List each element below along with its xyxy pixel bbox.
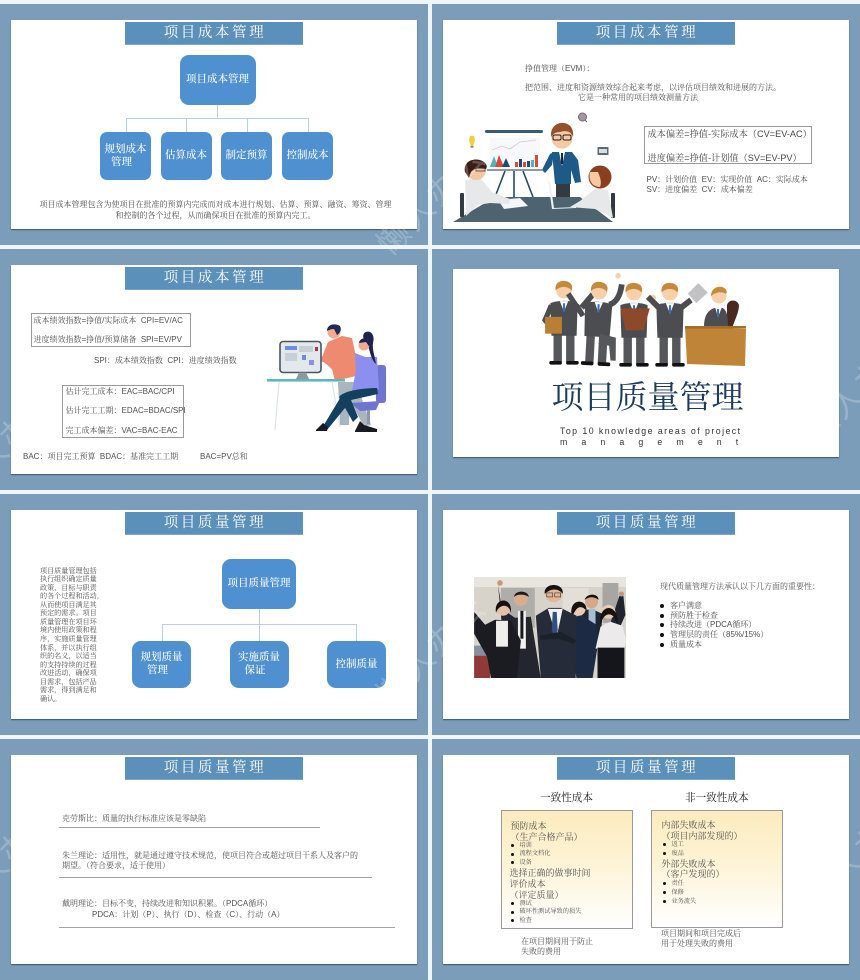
- bullet list: 持续改进（PDCA循环）: [670, 620, 756, 629]
- prevention cost: [510, 821, 583, 842]
- slide: performance indices: [0, 249, 428, 490]
- note: conformance cost: [521, 936, 593, 956]
- description text column: 织的名义，以适当: [40, 652, 97, 660]
- description text column: 确认。: [40, 695, 61, 703]
- external failure cost: （客户发现的）: [662, 869, 725, 879]
- slide: project cost management overview: [0, 4, 428, 245]
- org chart root box: 项目成本管理: [186, 74, 249, 85]
- bullet list: 管理层的责任（85%/15%）: [670, 630, 768, 638]
- legend text: [646, 174, 808, 194]
- external failure bullets: [662, 882, 666, 885]
- appraisal cost: （评定质量）: [510, 890, 564, 900]
- description text column: 改进活动，确保项: [40, 669, 97, 677]
- formula: SPI: 进度绩效指数=挣值/预算储备 SPI=EV/PV: [34, 335, 182, 344]
- slide: modern quality management: [432, 494, 860, 735]
- panel: white slide body: [10, 510, 417, 719]
- Juran theory text: 朱兰理论：适用性，就是通过遵守技术规范，使项目符合或超过项目干系人及客户的: [62, 850, 358, 860]
- panel: conformance cost box: 培训: [520, 842, 532, 848]
- Deming theory text: PDCA：计划（P）、执行（D）、检查（C）、行动（A）: [92, 910, 284, 918]
- org chart box: budget: [221, 132, 272, 180]
- external failure cost: [662, 858, 725, 879]
- panel: white slide body: [443, 755, 849, 964]
- formula box: CPI and SPI: [30, 313, 190, 346]
- panel: non-conformance cost box: 保修: [672, 888, 684, 896]
- EVM description text: [525, 82, 781, 102]
- note: conformance cost: 失败的费用: [521, 946, 561, 956]
- cover subtitle: [560, 426, 752, 447]
- org chart root box: 项目质量管理: [228, 578, 290, 589]
- description text column: [40, 566, 104, 703]
- cover title: 项目质量管理: [552, 379, 744, 415]
- heading bar: 项目质量管理: [164, 760, 266, 776]
- panel: white slide body: [443, 20, 849, 229]
- panel: non-conformance cost box: 责任: [672, 880, 684, 886]
- description text column: 的各个过程和活动，: [40, 592, 104, 600]
- bullet list: 质量成本: [670, 640, 702, 648]
- org chart box: estimate: [160, 132, 212, 180]
- internal failure bullets: [662, 843, 666, 846]
- Juran theory text: 期望。（符合要求，适于使用）: [62, 861, 170, 870]
- EVM heading text: 挣值管理（EVM）：: [525, 64, 594, 73]
- panel: non-conformance cost box: 业务流失: [672, 898, 696, 904]
- illustration: business team: [542, 273, 746, 367]
- legend text: SV：进度偏差 CV：成本偏差: [646, 184, 753, 194]
- org chart box: plan: [100, 132, 151, 180]
- cover subtitle: Top 10 knowledge areas of project: [560, 426, 742, 436]
- formula: EAC: 估计完工成本：EAC=BAC/CPI: [66, 387, 175, 396]
- org chart box: control: [327, 640, 386, 688]
- bullet list: 客户满意: [670, 601, 702, 610]
- formula: cost variance: 成本偏差=挣值-实际成本（CV=EV-AC）: [648, 129, 812, 139]
- org chart box: plan: 管理: [111, 157, 132, 168]
- footnote text: BAC：项目完工预算 BDAC：基准完工工期: [23, 452, 178, 460]
- panel: conformance cost box: 测试: [520, 900, 532, 906]
- appraisal cost: 评价成本: [510, 879, 546, 889]
- org chart box: control: 控制成本: [286, 150, 328, 161]
- description text column: 序，实施质量管理: [40, 635, 97, 643]
- EVM description text: 它是一种常用的项目绩效测量方法: [578, 93, 698, 102]
- heading bar: 项目成本管理: [596, 25, 698, 41]
- panel: non-conformance cost box: 返工: [672, 840, 684, 848]
- appraisal cost: [510, 868, 591, 900]
- cover subtitle: management: [560, 437, 752, 447]
- heading bar: 项目成本管理: [164, 25, 266, 41]
- formula box: EAC, EDAC, VAC: [62, 385, 184, 438]
- photo: business team: [474, 577, 626, 678]
- heading bar: [125, 757, 303, 780]
- org chart box: plan: 规划质量: [140, 652, 182, 663]
- appraisal cost: 选择正确的做事时间: [510, 868, 591, 878]
- external failure cost: 外部失败成本: [662, 858, 716, 868]
- formula box: CV and SV: [644, 126, 812, 164]
- note: conformance cost: 在项目期间用于防止: [521, 936, 593, 946]
- heading bar: 项目成本管理: [164, 270, 266, 286]
- org chart root box: [180, 54, 256, 104]
- watermark: 懒人办公: [370, 138, 494, 262]
- intro text: 现代质量管理方法承认以下几方面的重要性：: [660, 582, 820, 591]
- formula: EDAC: 估计完工工期：EDAC=BDAC/SPI: [66, 406, 186, 415]
- panel: white slide body: [443, 510, 849, 719]
- heading bar: 项目质量管理: [164, 515, 266, 531]
- EVM description text: 把范围、进度和资源绩效综合起来考虑，以评估项目绩效和进展的方法。: [525, 82, 781, 92]
- internal failure cost: （项目内部发现的）: [662, 831, 743, 841]
- org chart box: budget: 制定预算: [226, 150, 268, 161]
- column heading: conformance cost: 一致性成本: [540, 793, 593, 804]
- panel: white slide body: [10, 755, 417, 964]
- panel: conformance cost box: 破坏性测试导致的损失: [520, 908, 581, 915]
- org chart box: plan: 管理: [147, 665, 168, 676]
- heading bar: [557, 22, 735, 45]
- prevention cost: 预防成本: [510, 821, 547, 831]
- description text column: 项目质量管理包括: [40, 566, 97, 574]
- Deming theory text: [62, 898, 284, 918]
- heading bar: [557, 757, 735, 780]
- panel: white cover card: [453, 269, 839, 456]
- org chart root box: [222, 558, 296, 608]
- org chart box: control: [282, 132, 333, 180]
- heading bar: [125, 267, 303, 290]
- prevention bullets: [510, 844, 514, 847]
- slide: quality theories: [0, 739, 428, 980]
- Juran theory text: [62, 850, 358, 870]
- org chart box: assurance: 实施质量: [238, 652, 280, 663]
- org chart box: plan: [132, 640, 191, 688]
- description text column: 需求，得到满足和: [40, 686, 97, 694]
- formula: CPI: 成本绩效指数=挣值/实际成本 CPI=EV/AC: [34, 316, 183, 325]
- org chart box: assurance: 保证: [244, 665, 266, 676]
- formula: VAC: 完工成本偏差：VAC=BAC-EAC: [66, 426, 178, 434]
- org chart box: estimate: 估算成本: [165, 150, 207, 161]
- panel: white slide body: [10, 20, 417, 229]
- slide: earned value management: [432, 4, 860, 245]
- illustration: two people at a computer: [267, 324, 386, 432]
- internal failure cost: 内部失败成本: [662, 820, 716, 830]
- panel: white slide body: [10, 265, 417, 474]
- description text column: 目需求，包括产品: [40, 678, 97, 686]
- abbreviation text: SPI：成本绩效指数 CPI：进度绩效指数: [94, 356, 237, 364]
- legend text: PV：计划价值 EV：实现价值 AC：实际成本: [646, 174, 808, 184]
- prevention cost: （生产合格产品）: [510, 832, 583, 842]
- description text column: 体系，并以执行组: [40, 644, 97, 652]
- org chart box: plan: 规划成本: [104, 144, 146, 154]
- note: non-conformance cost: [661, 928, 741, 948]
- panel: conformance cost box: 检查: [520, 916, 532, 924]
- heading bar: [125, 22, 303, 45]
- org chart box: assurance: [230, 640, 288, 688]
- org chart box: control: 控制质量: [336, 658, 378, 670]
- description text column: 预定的需求。项目: [40, 609, 97, 617]
- bullet list: 预防胜于检查: [670, 610, 718, 620]
- illustration: team meeting: [453, 112, 615, 222]
- panel: conformance cost box: 流程文档化: [520, 850, 550, 857]
- slide: quality management overview: [0, 494, 428, 735]
- footnote text: BAC sum: BAC=PV总和: [200, 452, 248, 460]
- heading bar: 项目质量管理: [596, 760, 698, 776]
- Deming theory text: 戴明理论：目标不变，持续改进和知识积累。（PDCA循环）: [62, 898, 272, 908]
- description text column: 质量管理在项目环: [40, 618, 97, 626]
- heading bar: [557, 512, 735, 535]
- description text column: 政策、目标与职责: [40, 584, 97, 592]
- heading bar: 项目质量管理: [596, 515, 698, 531]
- panel: conformance cost box: 设备: [520, 858, 532, 866]
- heading bar: [125, 512, 303, 535]
- panel: conformance cost box: [500, 810, 632, 928]
- description text: 项目成本管理包含为使项目在批准的预算内完成而对成本进行规划、估算、预算、融资、筹资、管理和控制的各个过程，从而确保项目在批准的预算内完工。: [40, 200, 392, 220]
- slide: cost of quality: [432, 739, 860, 980]
- panel: non-conformance cost box: [650, 810, 782, 928]
- bullet list: [660, 601, 768, 648]
- description text column: 的支持持续的过程: [40, 661, 97, 669]
- slide: quality management section cover: [432, 249, 860, 490]
- note: non-conformance cost: 项目期间和项目完成后: [661, 928, 741, 938]
- panel: non-conformance cost box: 废品: [672, 850, 684, 856]
- description text column: 执行组织确定质量: [40, 575, 97, 583]
- Crosby theory text: 克劳斯比：质量的执行标准应该是零缺陷: [62, 814, 206, 823]
- formula: schedule variance: 进度偏差=挣值-计划值（SV=EV-PV）: [648, 153, 802, 163]
- description text column: 从而使项目满足其: [40, 601, 97, 609]
- watermark: 懒人办公: [370, 588, 494, 712]
- note: non-conformance cost: 用于处理失败的费用: [661, 938, 733, 948]
- column heading: non-conformance cost: 非一致性成本: [685, 793, 749, 804]
- description text column: 境内使用政策和程: [40, 626, 97, 634]
- internal failure cost: [662, 820, 743, 841]
- appraisal bullets: [510, 902, 514, 905]
